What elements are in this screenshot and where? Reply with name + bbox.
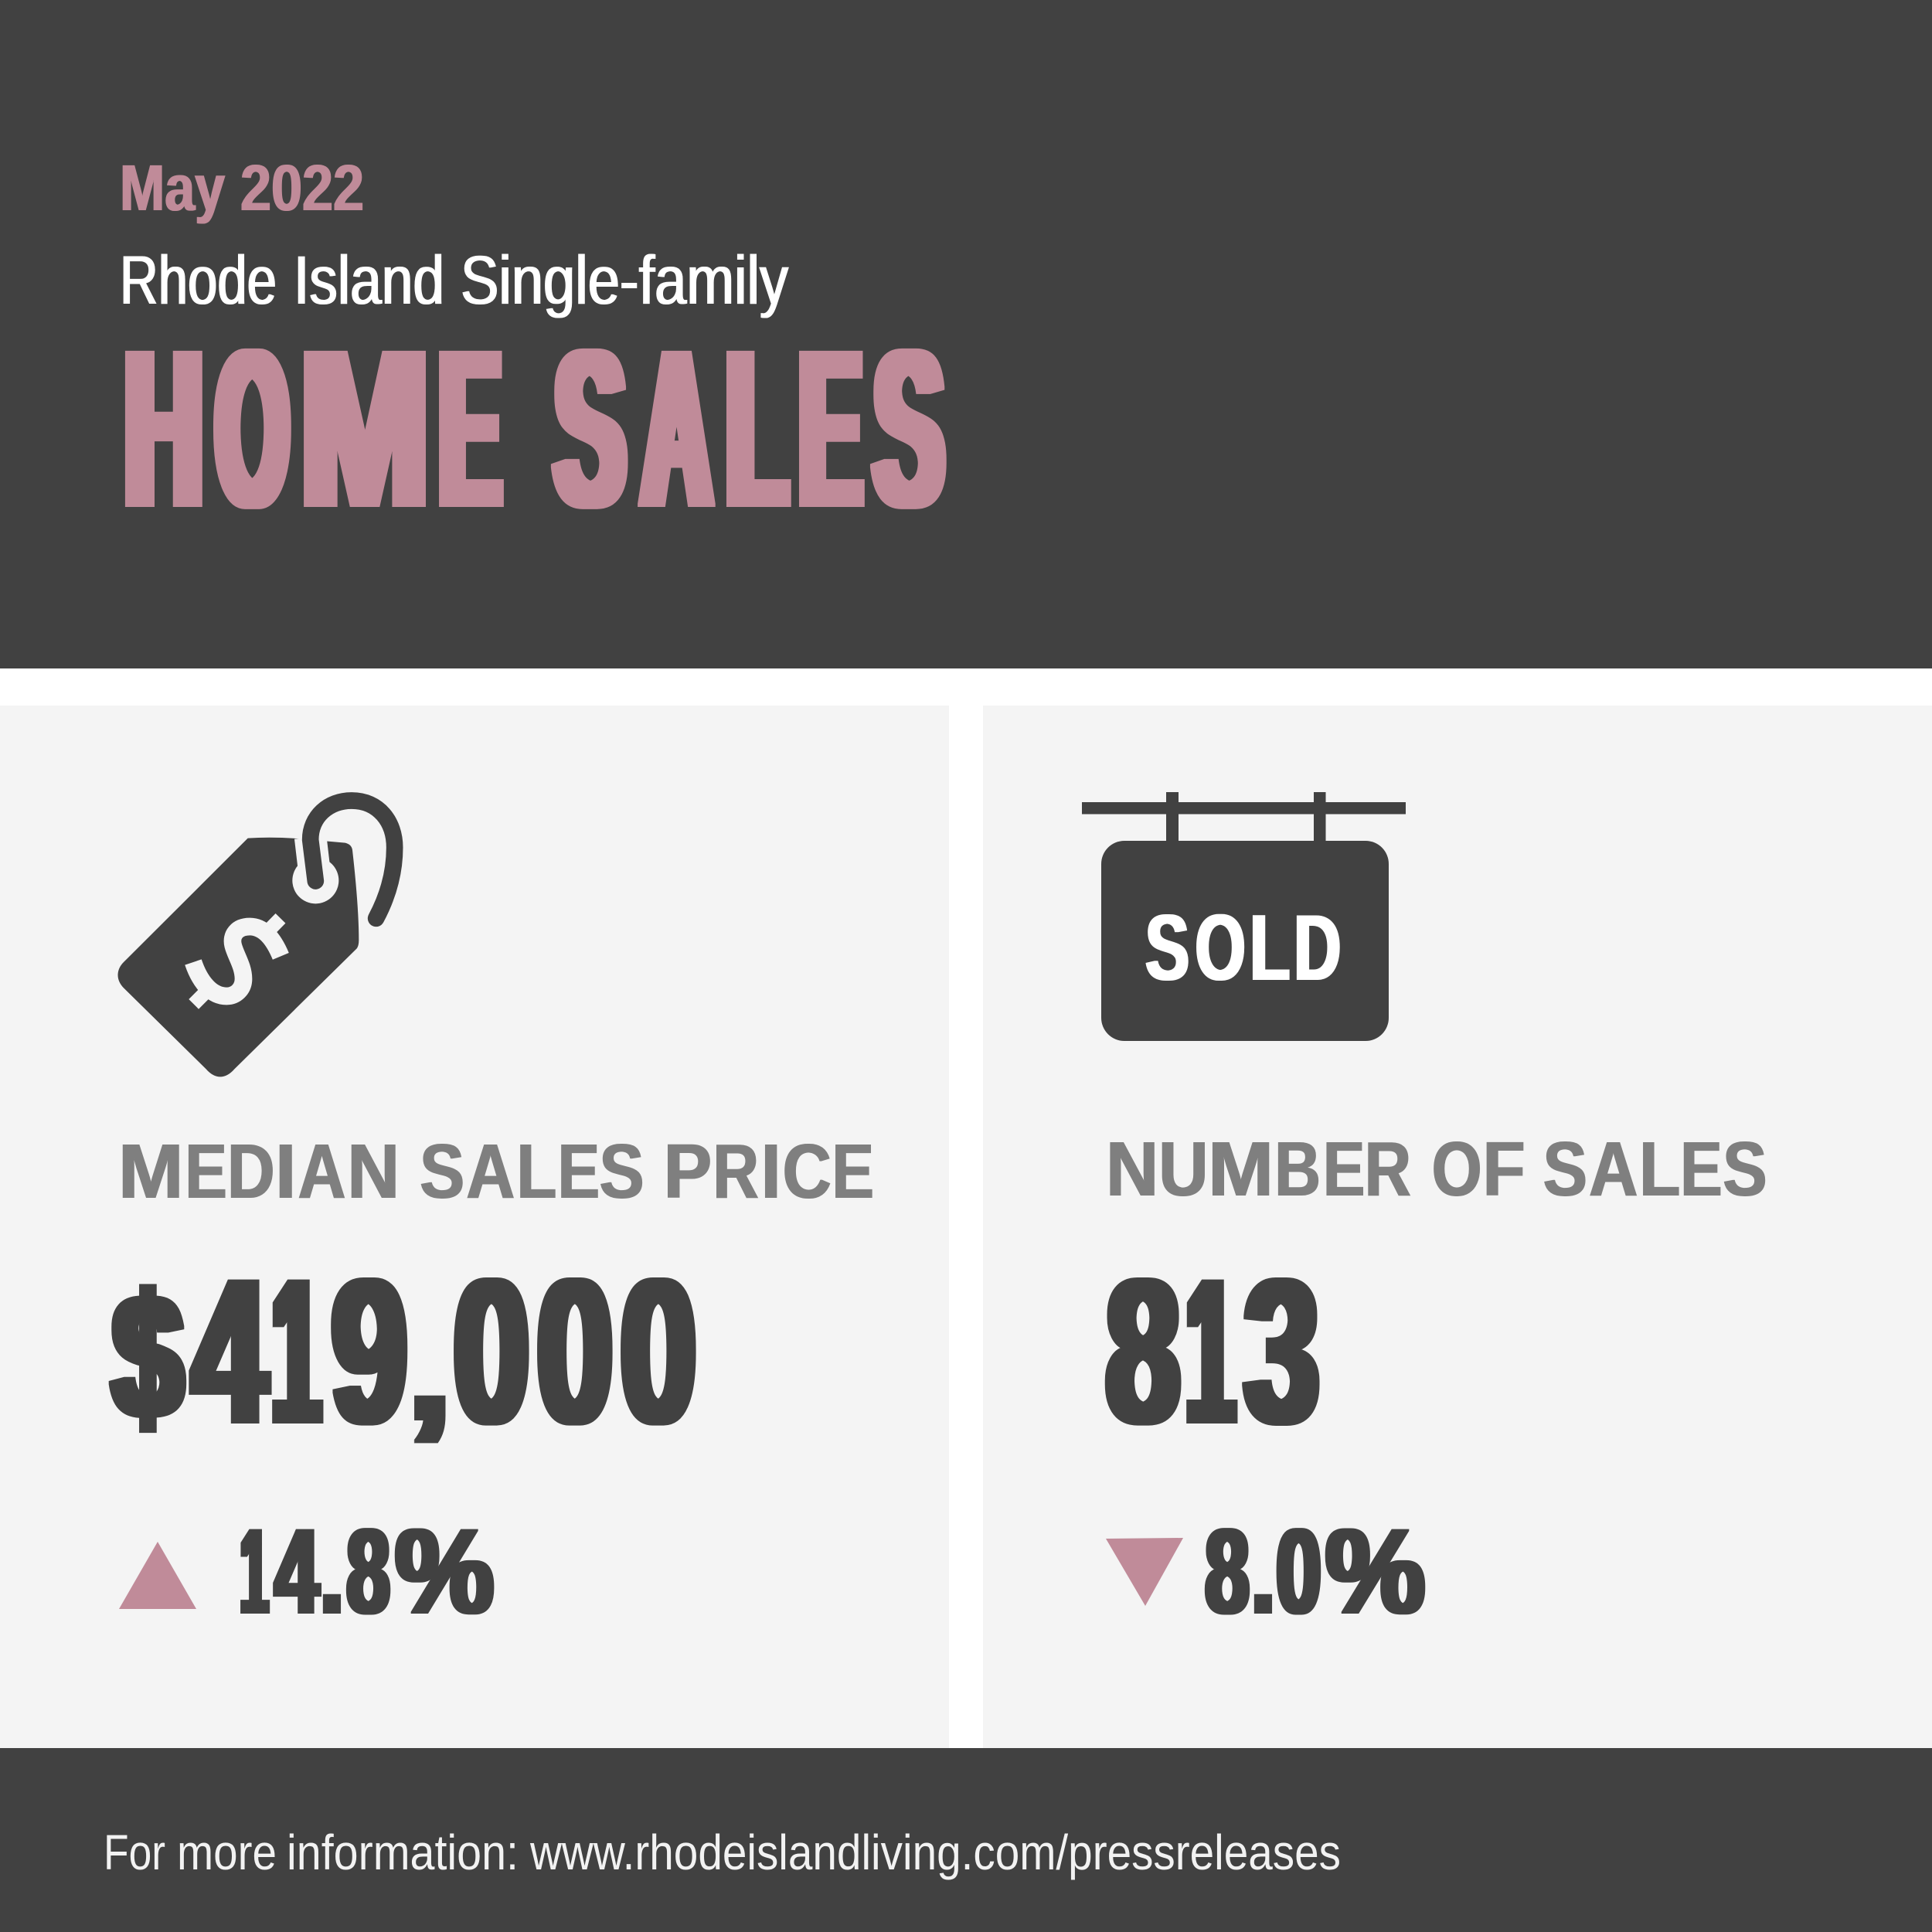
- value: 813: 8: [1106, 1237, 1180, 1466]
- change: 14.8%: [240, 1505, 494, 1639]
- icon: sold sign: S: [1145, 895, 1189, 1000]
- value: $419,000: $: [113, 1257, 182, 1456]
- subtitle: [120, 241, 788, 318]
- change: 14.8%: %: [395, 1505, 494, 1639]
- value: $419,000: 9: [332, 1237, 407, 1466]
- subtitle: Island: [294, 241, 444, 318]
- label: median sales price: E: [558, 1128, 600, 1215]
- date: May 2022: [120, 151, 364, 224]
- title: HOME SALES: O: [216, 304, 288, 553]
- panel: median sales price: [0, 706, 949, 1748]
- value: $419,000: 1: [272, 1237, 321, 1466]
- label: median sales price: N: [348, 1128, 400, 1215]
- label: number of sales: E: [1680, 1126, 1723, 1213]
- icon: price tag: [117, 801, 395, 1077]
- footer text: information:: [287, 1825, 519, 1880]
- icon: sold sign: D: [1294, 895, 1341, 1000]
- value: 813: 3: [1244, 1237, 1319, 1466]
- label: median sales price: D: [227, 1128, 275, 1215]
- label: number of sales: E: [1323, 1126, 1365, 1213]
- panel: number of sales: [983, 706, 1932, 1748]
- panel: header: S: [874, 304, 944, 553]
- label: median sales price: C: [783, 1128, 832, 1215]
- subtitle: Rhode: [120, 241, 277, 318]
- value: $419,000: ,: [410, 1287, 450, 1451]
- label: number of sales: A: [1589, 1126, 1638, 1213]
- title: HOME SALES: S: [555, 304, 625, 553]
- label: number of sales: N: [1106, 1126, 1158, 1213]
- icon: sold sign: [1082, 792, 1406, 1041]
- label: median sales price: S: [420, 1128, 464, 1215]
- icon: down triangle: [1106, 1538, 1183, 1606]
- label: median sales price: S: [600, 1128, 645, 1215]
- label: number of sales: S: [1543, 1126, 1587, 1213]
- value: 813: 1: [1186, 1237, 1235, 1466]
- subtitle: Single-family: [461, 241, 788, 318]
- label: number of sales: B: [1274, 1126, 1321, 1213]
- label: median sales price: I: [275, 1128, 296, 1215]
- value: 813: [1106, 1237, 1319, 1466]
- label: median sales price: A: [466, 1128, 515, 1215]
- footer text: For: [104, 1825, 165, 1880]
- footer text: www.rhodeislandliving.com/pressreleases: [529, 1825, 1341, 1880]
- label: median sales price: E: [832, 1128, 874, 1215]
- label: median sales price: A: [298, 1128, 346, 1215]
- value: $419,000: 0: [454, 1237, 529, 1466]
- title: HOME SALES: E: [800, 304, 861, 553]
- label: number of sales: F: [1483, 1126, 1526, 1213]
- change: 8.0%: %: [1325, 1505, 1425, 1639]
- value: $419,000: 4: [192, 1237, 268, 1466]
- label: number of sales: M: [1208, 1126, 1274, 1213]
- label: number of sales: L: [1639, 1126, 1680, 1213]
- label: median sales price: [118, 1128, 874, 1215]
- value: $419,000: [113, 1237, 696, 1466]
- label: median sales price: E: [185, 1128, 227, 1215]
- icon: up triangle: [119, 1542, 196, 1609]
- panel: footer: [0, 1748, 1932, 1932]
- label: number of sales: S: [1723, 1126, 1767, 1213]
- value: $419,000: 0: [537, 1237, 613, 1466]
- change: 14.8%: 4: [275, 1505, 319, 1639]
- label: median sales price: I: [761, 1128, 781, 1215]
- icon: sold sign: L: [1250, 895, 1290, 1000]
- icon: sold sign: O: [1196, 895, 1246, 1000]
- panel: header: [0, 0, 1932, 668]
- footer text: more: [177, 1825, 277, 1880]
- label: median sales price: M: [118, 1128, 184, 1215]
- title: HOME SALES: [125, 304, 944, 553]
- change: 14.8%: .: [320, 1505, 343, 1639]
- label: median sales price: R: [713, 1128, 759, 1215]
- change: 8.0%: [1206, 1505, 1425, 1639]
- date: May 2022: May: [120, 151, 225, 224]
- change: 8.0%: .: [1252, 1505, 1275, 1639]
- value: $419,000: 0: [621, 1237, 696, 1466]
- change: 14.8%: 8: [347, 1505, 389, 1639]
- label: number of sales: R: [1365, 1126, 1411, 1213]
- title: HOME SALES: A: [642, 304, 711, 553]
- label: number of sales: O: [1432, 1126, 1482, 1213]
- label: median sales price: L: [516, 1128, 556, 1215]
- title: HOME SALES: E: [440, 304, 501, 553]
- title: HOME SALES: M: [301, 304, 429, 553]
- date: May 2022: 2022: [240, 151, 364, 224]
- change: 8.0%: 8: [1206, 1505, 1249, 1639]
- title: HOME SALES: H: [125, 304, 202, 553]
- label: median sales price: P: [664, 1128, 712, 1215]
- change: 8.0%: 0: [1277, 1505, 1321, 1639]
- label: number of sales: U: [1158, 1126, 1208, 1213]
- title: HOME SALES: L: [726, 304, 787, 553]
- label: number of sales: [1106, 1126, 1767, 1213]
- change: 14.8%: 1: [240, 1505, 268, 1639]
